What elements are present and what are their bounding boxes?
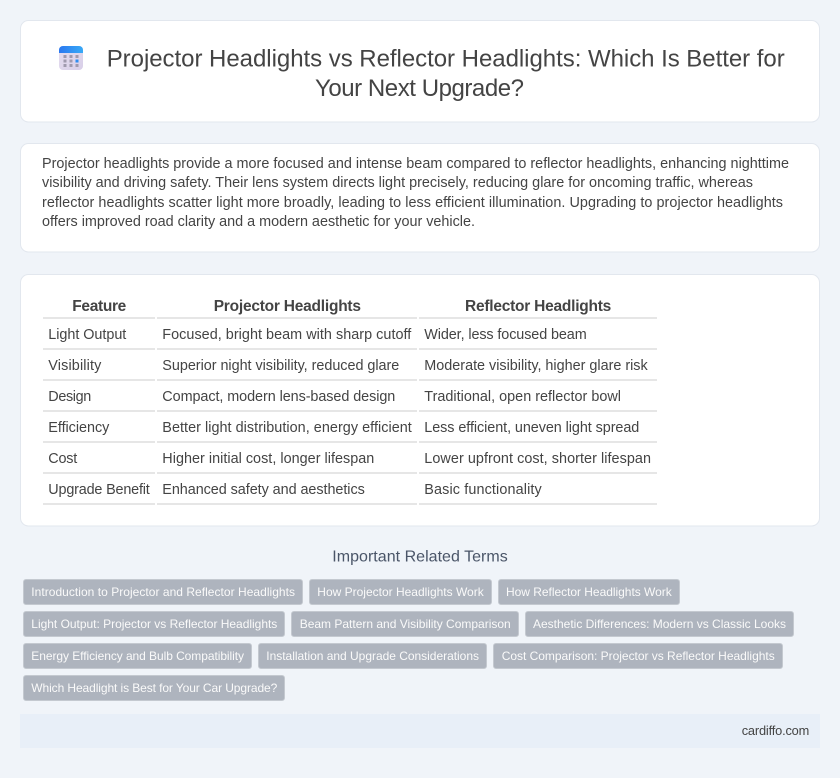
- row: Light Output: Light Output: [48, 327, 126, 343]
- row: Light Output: Focused, bright beam with sharp cutoff: [162, 327, 412, 343]
- tag: light output: Light Output: Projector vs Reflector Headlights: [31, 617, 277, 631]
- text block: introduction: Projector headlights provide a more focused and intense beam compared to reflector headlights, enhancing nighttime: [42, 156, 789, 172]
- table header row: Feature: [72, 298, 127, 315]
- tag: aesthetic differences: [526, 612, 794, 636]
- tag: energy efficiency: [24, 644, 252, 668]
- tag: which headlight is best: [24, 676, 284, 700]
- text block: introduction: visibility and driving safety. Their lens system directs light precisely, reducing glare for oncoming traffic, whereas: [42, 175, 753, 191]
- row: Efficiency: Less efficient, uneven light spread: [424, 420, 639, 436]
- tag: installation: [258, 644, 486, 668]
- row: Design: Compact, modern lens-based design: [162, 389, 395, 405]
- footer source text: cardiffo.com: [742, 723, 809, 738]
- row: Design: [48, 389, 621, 405]
- title: [107, 46, 785, 102]
- tag: introduction: [24, 580, 302, 604]
- tag: which headlight is best: Which Headlight is Best for Your Car Upgrade?: [31, 681, 278, 695]
- row: Efficiency: [48, 420, 639, 436]
- text block: introduction: reflector headlights scatter light more broadly, leading to less efficient illumination. Upgrading to projector headlights: [42, 195, 783, 211]
- panel: related term tags: [24, 580, 794, 700]
- tag: how projector headlights work: How Projector Headlights Work: [317, 585, 485, 599]
- tag: light output: [24, 612, 284, 636]
- tag: how reflector headlights work: [498, 580, 680, 604]
- panel: title header: [20, 20, 820, 122]
- title: Projector Headlights vs Reflector Headlights: Which Is Better for: [107, 46, 785, 72]
- text block: introduction: offers improved road clarity and a modern aesthetic for your vehicle.: [42, 214, 475, 230]
- icon: calendar grid: [59, 46, 83, 70]
- row: Cost: Cost: [48, 451, 77, 467]
- row: Visibility: Superior night visibility, reduced glare: [162, 358, 399, 374]
- table header row: Reflector Headlights: [465, 298, 611, 315]
- row: Upgrade Benefit: Basic functionality: [424, 482, 542, 498]
- tag: introduction: Introduction to Projector and Reflector Headlights: [31, 585, 295, 599]
- row: Efficiency: Efficiency: [48, 420, 110, 436]
- tag: aesthetic differences: Aesthetic Differences: Modern vs Classic Looks: [533, 617, 786, 631]
- tag: cost comparison: Cost Comparison: Projector vs Reflector Headlights: [502, 649, 775, 663]
- row: Design: Traditional, open reflector bowl: [424, 389, 621, 405]
- text block: introduction: [42, 156, 789, 230]
- panel: comparison table: [20, 274, 820, 526]
- row: Efficiency: Better light distribution, energy efficient: [162, 420, 412, 436]
- footer: [20, 714, 820, 748]
- tag: cost comparison: [494, 644, 782, 668]
- row: Cost: [48, 451, 651, 467]
- row: Upgrade Benefit: Enhanced safety and aesthetics: [162, 482, 365, 498]
- table header row: Projector Headlights: [214, 298, 361, 315]
- row: Visibility: Visibility: [48, 358, 102, 374]
- heading: related terms: Important Related Terms: [332, 548, 508, 566]
- row: Upgrade Benefit: [48, 482, 542, 498]
- tag: energy efficiency: Energy Efficiency and Bulb Compatibility: [31, 649, 244, 663]
- row: Light Output: Wider, less focused beam: [424, 327, 587, 343]
- row: Upgrade Benefit: Upgrade Benefit: [48, 482, 150, 498]
- tag: how reflector headlights work: How Reflector Headlights Work: [506, 585, 673, 599]
- panel: introduction: [20, 144, 820, 252]
- tag: installation: Installation and Upgrade Considerations: [266, 649, 479, 663]
- row: Visibility: [48, 358, 648, 374]
- row: Visibility: Moderate visibility, higher glare risk: [424, 358, 648, 374]
- title: Your Next Upgrade?: [315, 75, 524, 102]
- table header row: [72, 298, 611, 315]
- row: Cost: Higher initial cost, longer lifespan: [162, 451, 374, 467]
- row: Light Output: [48, 327, 587, 343]
- tag: beam pattern: [292, 612, 518, 636]
- row: Design: Design: [48, 389, 91, 405]
- tag: beam pattern: Beam Pattern and Visibility Comparison: [300, 617, 511, 631]
- tag: how projector headlights work: [310, 580, 492, 604]
- row: Cost: Lower upfront cost, shorter lifespan: [424, 451, 651, 467]
